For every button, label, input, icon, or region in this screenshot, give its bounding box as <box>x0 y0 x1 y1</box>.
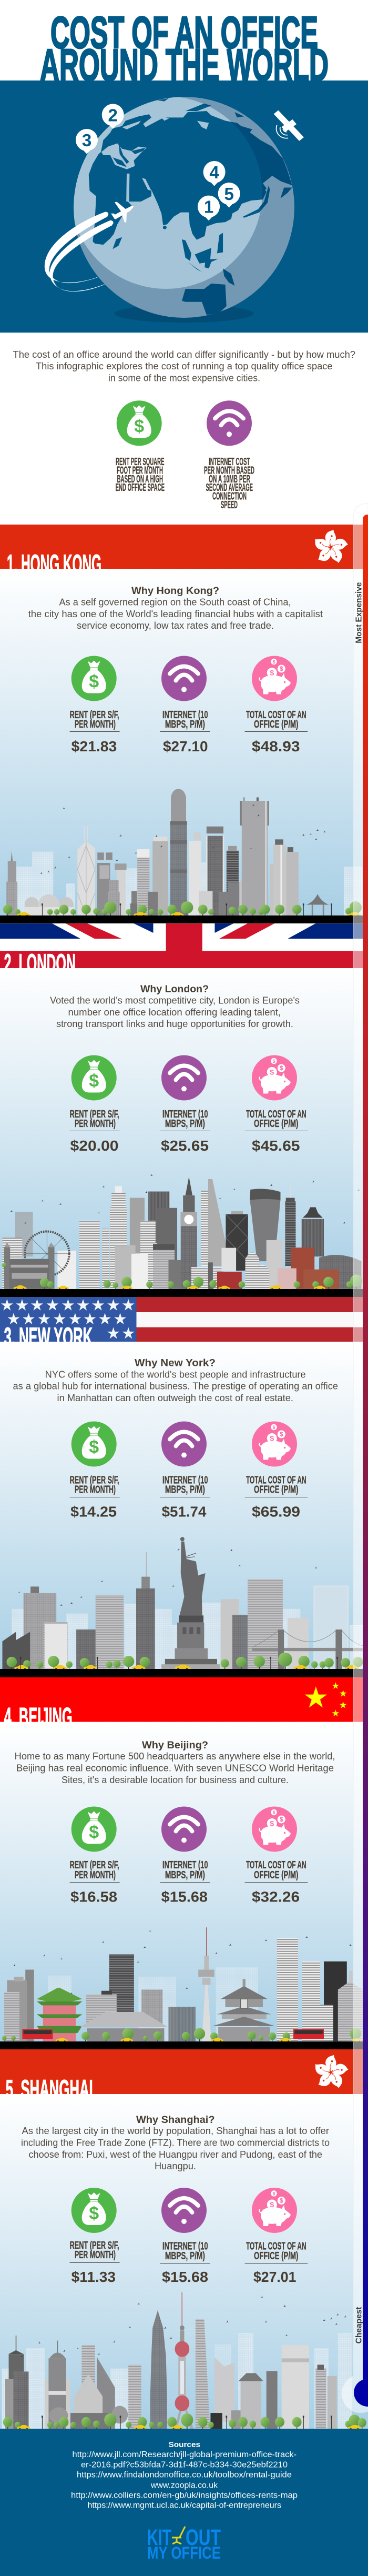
icon: rent: $ <box>89 1071 99 1091</box>
text: END OFFICE SPACE <box>116 482 165 494</box>
icon: rent <box>71 1807 117 1852</box>
stat: internet: INTERNET (10 <box>162 1109 208 1120</box>
legend: rent label: BASED ON A HIGH <box>117 474 163 485</box>
ground <box>0 1669 368 1677</box>
icon: rent <box>71 2188 117 2233</box>
why Hong Kong text: service economy, low tax rates and free trade. <box>77 620 274 631</box>
why Beijing text: Sites, it's a desirable location for business and culture. <box>62 1775 289 1785</box>
flag band: United Kingdom <box>0 923 368 978</box>
why London text: number one office location offering leading talent, <box>68 1007 281 1018</box>
why Hong Kong text: the city has one of the World's leading financial hubs with a capitalist <box>28 609 323 619</box>
icon: internet <box>161 656 207 701</box>
stat: internet: MBPS, P/M) <box>165 1118 205 1130</box>
stat: rent: RENT (PER S/F, <box>70 709 119 721</box>
sources: er-2016.pdf?c53bfda7-3d1f-487c-b334-30e25ebf2210 <box>81 2460 288 2470</box>
why London text: strong transport links and huge opportunities for growth. <box>56 1019 293 1029</box>
panel: Beijing <box>0 1677 368 2049</box>
icon: internet <box>161 1807 207 1852</box>
icon: total cost: $ <box>270 2200 274 2209</box>
legend: internet label: ON A 10MB PER <box>209 474 250 485</box>
stat: rent: RENT (PER S/F, <box>70 1474 119 1486</box>
skyline: Hong Kong <box>3 789 364 917</box>
icon: total cost <box>252 1807 297 1852</box>
stat: total: TOTAL COST OF AN <box>246 1474 306 1486</box>
title <box>40 8 329 90</box>
icon: total cost: $ <box>272 2191 275 2196</box>
why Shanghai text: choose from: Puxi, west of the Huangpu river and Pudong, east of the <box>28 2149 322 2160</box>
stat: total: OFFICE (P/M) <box>254 719 298 730</box>
stat: total: TOTAL COST OF AN <box>246 1109 306 1120</box>
stat: total: $27.01 <box>253 2269 296 2285</box>
flag band: United Kingdom: 2. LONDON <box>4 949 76 978</box>
icon: total cost: $ <box>272 1810 275 1815</box>
skyline: New York <box>2 1537 364 1670</box>
stat: total <box>245 1859 308 1905</box>
legend: internet icon <box>207 400 252 446</box>
intro text <box>13 349 355 383</box>
icon: internet <box>161 2188 207 2233</box>
panel: Hong Kong <box>0 525 368 923</box>
ground <box>0 915 368 923</box>
stat: internet: MBPS, P/M) <box>165 719 205 730</box>
stat: rent: RENT (PER S/F, <box>70 1109 119 1120</box>
why Beijing text: Beijing has real economic influence. With seven UNESCO World Heritage <box>16 1763 334 1773</box>
why Hong Kong text: Why Hong Kong? <box>131 586 219 597</box>
sources: http://www.colliers.com/en-gb/uk/insights/offices-rents-map <box>71 2491 298 2500</box>
why Beijing text: Why Beijing? <box>142 1740 208 1751</box>
stat: total: TOTAL COST OF AN <box>246 2241 306 2252</box>
panel: Shanghai <box>0 2049 368 2430</box>
stat: internet: MBPS, P/M) <box>165 2250 205 2262</box>
icon: rent: $ <box>89 1437 99 1457</box>
icon: rent: $ <box>89 671 99 691</box>
stat: internet: MBPS, P/M) <box>165 1484 205 1496</box>
icon: total cost: $ <box>270 1819 274 1828</box>
stat: rent <box>70 709 120 754</box>
stat: internet <box>160 1474 210 1520</box>
flag band: Hong Kong: 1. HONG KONG <box>7 549 101 579</box>
icon: internet <box>161 1055 207 1101</box>
stat: total: $45.65 <box>252 1138 300 1154</box>
sources: https://www.mgmt.ucl.ac.uk/capital-of-entrepreneurs <box>87 2501 281 2510</box>
icon: total cost <box>252 1055 297 1101</box>
icon: total cost: $ <box>272 659 275 665</box>
stat: internet: INTERNET (10 <box>162 1474 208 1486</box>
icon: total cost <box>252 656 297 701</box>
stat: internet <box>160 1859 210 1905</box>
stat: rent <box>70 1109 120 1154</box>
logo: KIT <box>147 2525 171 2550</box>
map pins: 2 <box>108 105 118 125</box>
logo <box>147 2525 221 2562</box>
stat: internet: $25.65 <box>161 1138 209 1154</box>
text: SECOND AVERAGE <box>206 482 253 494</box>
stat: total <box>245 1474 308 1520</box>
icon: total cost: $ <box>270 1434 274 1443</box>
stat: rent: PER MONTH) <box>75 1869 116 1881</box>
stat: rent: PER MONTH) <box>75 2249 116 2261</box>
why Hong Kong text: As a self governed region on the South coast of China, <box>59 597 291 607</box>
stat: total: OFFICE (P/M) <box>254 1484 298 1496</box>
why Shanghai text <box>21 2115 330 2171</box>
stat: internet: $15.68 <box>162 2269 208 2285</box>
map pins: 4 <box>209 163 219 182</box>
stat: rent <box>70 2240 120 2285</box>
stat: rent: PER MONTH) <box>75 719 116 730</box>
panel: header globe <box>0 80 368 333</box>
skyline: Shanghai <box>2 2292 366 2430</box>
stat: rent: RENT (PER S/F, <box>70 2240 119 2251</box>
stat: total: OFFICE (P/M) <box>254 1869 298 1881</box>
stat: internet: MBPS, P/M) <box>165 1869 205 1881</box>
legend: rent icon: $ <box>134 416 144 436</box>
stat: rent: $21.83 <box>71 738 117 754</box>
stat: rent: PER MONTH) <box>75 1484 116 1496</box>
icon: rent <box>71 1055 117 1101</box>
flag band: United States <box>0 1297 368 1352</box>
stat: total <box>245 1109 308 1154</box>
icon: rent: $ <box>89 2203 99 2223</box>
why Shanghai text: Why Shanghai? <box>136 2115 214 2126</box>
stat: total <box>245 2241 308 2285</box>
stat: rent: $16.58 <box>70 1888 117 1905</box>
stat: rent: PER MONTH) <box>75 1118 116 1130</box>
why Beijing text: Home to as many Fortune 500 headquarters as anywhere else in the world, <box>15 1751 335 1762</box>
stat: internet: INTERNET (10 <box>162 709 208 721</box>
why Shanghai text: including the Free Trade Zone (FTZ). There are two commercial districts to <box>21 2138 330 2148</box>
icon: rent <box>71 1422 117 1467</box>
label: cheapest: Cheapest <box>354 2307 364 2343</box>
sources: www.zoopla.co.uk <box>150 2481 218 2490</box>
icon: total cost: $ <box>270 668 274 677</box>
icon: total cost: $ <box>272 1059 275 1064</box>
sources: http://www.jll.com/Research/jll-global-premium-office-track- <box>73 2450 297 2459</box>
stat: total: TOTAL COST OF AN <box>246 709 306 721</box>
stat: internet: INTERNET (10 <box>162 1859 208 1871</box>
legend: internet label: SPEED <box>221 499 238 511</box>
icon: total cost: $ <box>280 665 283 672</box>
why London text: Why London? <box>140 984 209 995</box>
why New York text: in Manhattan can often outweigh the cost of real estate. <box>57 1393 293 1403</box>
icon: internet <box>161 1422 207 1467</box>
why Hong Kong text <box>28 586 323 631</box>
why New York text <box>13 1357 338 1403</box>
intro text: The cost of an office around the world can differ significantly - but by how much? <box>13 349 355 360</box>
stat: rent <box>70 1474 120 1520</box>
stat: internet <box>160 2241 210 2285</box>
icon: satellite <box>276 112 302 139</box>
map pins <box>76 104 240 220</box>
icon: total cost: $ <box>280 1431 283 1438</box>
flag band: Shanghai: 5. SHANGHAI <box>6 2075 93 2104</box>
flag band: Hong Kong <box>0 525 368 579</box>
sources: Sources <box>168 2440 200 2449</box>
label: most expensive: Most Expensive <box>354 582 364 643</box>
footer <box>0 2429 368 2576</box>
icon: total cost: $ <box>280 1816 283 1823</box>
legend: internet label <box>204 456 254 511</box>
legend: rent icon <box>117 400 162 446</box>
ground <box>0 2041 368 2049</box>
globe shadow <box>115 305 253 323</box>
ground <box>0 1289 368 1297</box>
flag band: Shanghai <box>0 2049 368 2104</box>
stat: rent: $14.25 <box>70 1504 117 1520</box>
legend: internet label: CONNECTION <box>212 491 247 502</box>
stat: internet <box>160 709 210 754</box>
icon: total cost: $ <box>280 1064 283 1072</box>
icon: total cost: $ <box>270 1068 274 1076</box>
stat: total: $65.99 <box>252 1504 300 1520</box>
stat: total: OFFICE (P/M) <box>254 2250 298 2262</box>
icon: rent <box>71 656 117 701</box>
flight trails and plane <box>45 202 134 291</box>
stat: rent: $20.00 <box>70 1138 119 1154</box>
intro text: in some of the most expensive cities. <box>108 373 260 383</box>
stat: rent: $11.33 <box>71 2269 116 2285</box>
stat: internet: INTERNET (10 <box>162 2241 208 2252</box>
skyline: Beijing <box>2 1927 363 2042</box>
stat: rent: RENT (PER S/F, <box>70 1859 119 1871</box>
stat: internet: $27.10 <box>163 738 208 754</box>
map pins: 1 <box>204 197 213 217</box>
icon: rent: $ <box>89 1823 99 1843</box>
stat: total: $48.93 <box>252 738 300 754</box>
why Beijing text <box>15 1740 335 1785</box>
why London text <box>50 984 300 1029</box>
panel: London <box>0 923 368 1297</box>
why Shanghai text: As the largest city in the world by population, Shanghai has a lot to offer <box>22 2126 329 2136</box>
text: PER MONTH BASED <box>204 465 254 477</box>
sources: https://www.findalondonoffice.co.uk/toolbox/rental-guide <box>77 2471 292 2479</box>
stat: internet: $51.74 <box>162 1504 207 1520</box>
flag band: China: 4. BEIJING <box>4 1703 73 1732</box>
logo: OUT <box>186 2525 221 2550</box>
why New York text: NYC offers some of the world's best people and infrastructure <box>45 1369 306 1380</box>
thermometer scale <box>342 504 368 2413</box>
map pins: 3 <box>82 130 91 150</box>
map pins: 5 <box>224 184 234 204</box>
legend: internet label: INTERNET COST <box>209 456 250 468</box>
panel: New York <box>0 1297 368 1677</box>
why New York text: as a global hub for international business. The prestige of operating an office <box>13 1381 338 1392</box>
stat: internet: $15.68 <box>161 1888 208 1905</box>
intro text: This infographic explores the cost of running a top quality office space <box>36 361 333 371</box>
logo: MY OFFICE <box>147 2543 221 2562</box>
flag band: China <box>0 1677 368 1732</box>
text: RENT PER SQUARE <box>116 456 164 468</box>
stat: total: $32.26 <box>252 1888 300 1905</box>
flag band: United States: 3. NEW YORK <box>4 1322 93 1352</box>
skyline: London <box>2 1174 362 1290</box>
sources <box>71 2440 298 2510</box>
icon: total cost <box>252 2188 297 2233</box>
why London text: Voted the world's most competitive city, London is Europe's <box>50 995 300 1006</box>
icon: total cost <box>252 1422 297 1467</box>
globe with continents <box>68 92 300 323</box>
stat: rent <box>70 1859 120 1905</box>
stat: total: OFFICE (P/M) <box>254 1118 298 1130</box>
stat: total: TOTAL COST OF AN <box>246 1859 306 1871</box>
stat: internet <box>160 1109 210 1154</box>
icon: total cost: $ <box>272 1425 275 1430</box>
icon: total cost: $ <box>280 2197 283 2205</box>
why Shanghai text: Huangpu. <box>155 2161 196 2171</box>
stat: total <box>245 709 308 754</box>
legend: rent label: FOOT PER MONTH <box>117 465 163 477</box>
why New York text: Why New York? <box>135 1357 216 1369</box>
legend: rent label <box>116 456 165 494</box>
